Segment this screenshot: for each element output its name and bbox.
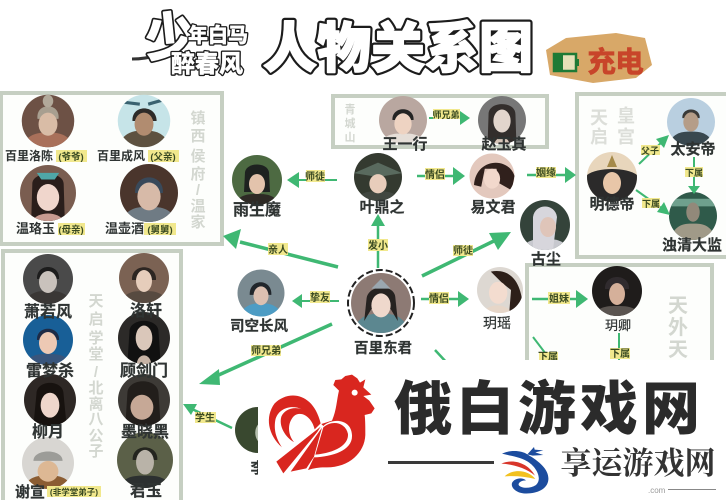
avatar: Wen Luoyu [20,165,76,221]
avatar [238,270,284,316]
name: 易文君 [470,198,516,216]
arrow: marriage to palace: 姻缘 [536,166,556,179]
arrow: stub below Baili Dongjun [435,350,448,364]
arrow: subordinate from Yue Qing [610,333,630,370]
panel heading: Tianqi palace: 天 [590,108,608,128]
arrow: master and disciple to Gu Chen [422,232,511,276]
name: Baili Luochen: 百里洛陈 [5,148,53,163]
arrow: senior brothers to academy [199,324,332,385]
tag: not an academy disciple: (非学堂弟子) [50,487,98,497]
name: Luo Xuan: 洛轩 [130,302,162,320]
panel heading: Tianqi palace: 启 [590,127,608,147]
avatar: Gu Jianmen [118,312,170,364]
arrow: sisters: 姐妹 [549,292,569,305]
avatar: Liu Yue [24,374,76,426]
arrow: marriage to palace [527,166,576,183]
arrow: close friend: 挚友 [310,291,330,304]
name: Xiao Ruofeng: 萧若风 [24,302,72,321]
name: Zhuoqing eunuch: 浊清大监 [662,236,722,254]
avatar [232,155,282,205]
relation: subordinate, Taian [685,157,703,194]
avatar: Wen Hujiu [120,164,178,222]
arrow: close friend [292,291,339,308]
panel heading: Qingcheng mountain [344,102,356,144]
watermark name: E Bai game site: 俄白游戏网 [394,377,704,442]
avatar [235,407,281,453]
divider line [388,461,494,464]
panel heading: Tianqi palace: 宫 [617,126,635,147]
name: Mingde emperor: 明德帝 [589,195,635,213]
panel heading: Tianqi academy / Beili eight [88,293,104,460]
name: Lei Mengsha: 雷梦杀 [26,361,74,380]
logo: blue dragon [501,447,548,493]
title: show logo: 少 [142,7,198,68]
avatar [470,154,514,198]
arrow: childhood friend: 发小 [368,239,388,252]
character: Yue Yao [477,267,523,331]
panel heading: Tianqi academy / Beili eight: 八 [88,411,104,428]
arrow: student to academy [183,404,232,428]
arrow: master and disciple to Yu Shengmo: 师徒 [305,170,325,183]
character: Yi Wenjun [470,154,516,216]
panel heading: Tianwai tian [668,295,688,361]
avatar [351,273,411,333]
avatar: Wang Yixing [379,96,427,144]
relation: senior brother [429,109,470,125]
arrow: sisters [532,290,588,308]
name: Mo Xiaohei: 墨晓黑 [121,423,169,441]
arrow: student to academy: 学生 [195,411,215,424]
tag: uncle [144,223,176,236]
panel heading: Tianqi academy / Beili eight: / [94,364,99,381]
name: Yue Qing: 玥卿 [605,318,631,333]
tag: mother: (母亲) [58,224,84,236]
relation: father and son: 父子 [641,145,659,156]
avatar: Taian emperor [667,98,715,146]
avatar: Mingde emperor [587,152,637,202]
tag: father [148,150,179,163]
relation: senior brother: 师兄弟 [432,109,460,120]
name: Baili Chengfeng: 百里成风 [97,148,145,163]
avatar: Xie Xuan [22,437,74,489]
character: Li, partly covered [235,407,281,477]
panel heading: Tianqi academy / Beili eight: 子 [88,443,104,460]
arrow: lovers to Yue Yao: 情侣 [429,292,449,305]
panel: Tianwai tian [525,263,714,360]
panel heading: Zhenxi marquis / Wen family: / [196,182,201,199]
name: 司空长风 [230,317,288,335]
title: relationship chart heading: 人物关系图 [263,19,533,79]
panel heading: Tianqi academy / Beili eight: 公 [88,428,104,445]
title: show logo: 年白马 [188,23,248,47]
panel: Tianqi imperial palace [577,94,726,257]
name: Liu Yue: 柳月 [32,423,64,441]
name: Gu Jianmen: 顾剑门 [120,361,168,380]
panel heading: Tianqi academy / Beili eight: 堂 [88,346,104,363]
avatar: Lei Mengsha [23,315,73,365]
avatar: Zhao Yuzhen [478,96,526,144]
panel heading: Tianqi academy / Beili eight: 离 [88,395,104,413]
relation: subordinate, Taian: 下属 [685,168,703,178]
domain suffix: .com [648,486,666,495]
arrow: relatives to Zhenxi family [223,229,338,267]
character: Ye Dingzhi [354,153,405,216]
character: Yu Shengmo [232,155,282,219]
title: show logo: 醉春风 [171,51,243,78]
avatar: Jun Yu [117,432,173,488]
relation: subordinate, Mingde [636,190,670,215]
name: 百里东君 [354,339,412,357]
name: Jun Yu: 君玉 [130,483,162,500]
panel heading: Tianqi palace: 皇 [617,106,635,126]
panel heading: Zhenxi marquis / Wen family: 家 [190,213,206,231]
panel heading: Tianqi academy / Beili eight: 北 [88,380,104,397]
avatar: Zhuoqing eunuch [669,192,717,240]
arrow: lovers to Yue Yao [421,291,469,307]
panel heading: Tianwai tian: 天 [668,295,688,317]
title: show logo: 年白马 [188,23,248,47]
name: 雨生魔 [233,201,281,219]
panel heading: Tianwai tian: 天 [668,339,688,361]
panel heading: Tianqi academy / Beili eight: 启 [88,311,104,328]
panel heading: Zhenxi marquis / Wen family: 温 [190,198,206,215]
avatar: Xiao Ruofeng [23,254,73,304]
tag: grandfather: (爷爷) [58,151,84,163]
name: 古尘 [531,251,561,268]
panel heading: Qingcheng mountain: 城 [344,116,356,130]
arrow: master and disciple to Gu Chen: 师徒 [453,244,473,257]
name: Wen Hujiu: 温壶酒 [105,221,144,236]
name: Wang Yixing: 王一行 [382,136,428,153]
avatar [520,200,570,250]
panel heading: Zhenxi marquis / Wen family: 西 [190,128,206,145]
panel: Zhenxi marquis family [1,93,222,244]
watermark panel [258,360,726,500]
arrow: lovers to Yi Wenjun: 情侣 [425,168,445,181]
tag: uncle: (舅舅) [147,224,173,236]
avatar [354,153,402,201]
panel: Qingcheng mountain [333,96,547,153]
avatar: Baili Luochen [22,95,74,147]
panel heading: Zhenxi marquis / Wen family: 侯 [190,147,206,165]
arrow: subordinate, left: 下属 [538,351,558,363]
character: Baili Dongjun, central [348,270,414,357]
name: 叶鼎之 [359,198,405,216]
relation: subordinate, Mingde: 下属 [642,199,660,209]
domain suffix [648,486,716,495]
title: show logo: 醉春风 [171,51,243,78]
arrow: subordinate, left [533,337,558,363]
panel heading: Qingcheng mountain: 青 [344,102,356,116]
logo: red rooster [269,375,375,473]
arrow: childhood friend [368,214,388,268]
arrow: senior brothers to academy: 师兄弟 [251,344,281,357]
avatar: Yue Qing [592,266,642,316]
title: relationship chart heading: 人物关系图 [263,19,533,79]
panel heading: Zhenxi marquis / Wen family: 镇 [190,109,206,127]
title: show logo: 少 [142,7,198,68]
avatar ring [348,270,414,336]
badge: charge: 充电 [587,45,644,79]
badge: charge [546,33,652,83]
avatar: Baili Chengfeng [118,95,170,147]
panel heading: Tianqi academy / Beili eight: 学 [88,329,104,347]
panel heading: Tianqi academy / Beili eight: 天 [88,293,104,310]
avatar: Luo Xuan [119,253,169,303]
avatar: Mo Xiaohei [118,374,170,426]
panel heading: Tianwai tian: 外 [668,316,688,339]
name: 李 [250,459,266,477]
arrow: master and disciple to Yu Shengmo [287,170,337,188]
avatar [477,267,523,313]
tag: father: (父亲) [150,151,176,163]
panel heading: Zhenxi marquis / Wen family [190,109,206,231]
name: Wen Luoyu: 温珞玉 [16,221,55,236]
panel: Tianqi academy [3,251,181,500]
name: Zhao Yuzhen: 赵玉真 [481,135,527,153]
arrow: lovers to Yi Wenjun [417,167,465,185]
arrow: subordinate from Yue Qing: 下属 [610,348,630,360]
name: Taian emperor: 太安帝 [670,140,716,158]
relation: father and son [639,135,669,164]
panel heading: Tianqi palace [590,106,635,147]
watermark name: Xiangyun game site: 享运游戏网 [560,446,716,481]
name: 玥瑶 [483,315,511,331]
arrow: relatives to Zhenxi family: 亲人 [268,243,288,256]
character: Sikong Changfeng [230,270,288,335]
tag: grandfather [56,150,87,163]
panel heading: Zhenxi marquis / Wen family: 府 [190,165,206,183]
character: Gu Chen [520,200,570,268]
title: show logo [132,7,248,78]
panel heading: Qingcheng mountain: 山 [344,130,356,144]
